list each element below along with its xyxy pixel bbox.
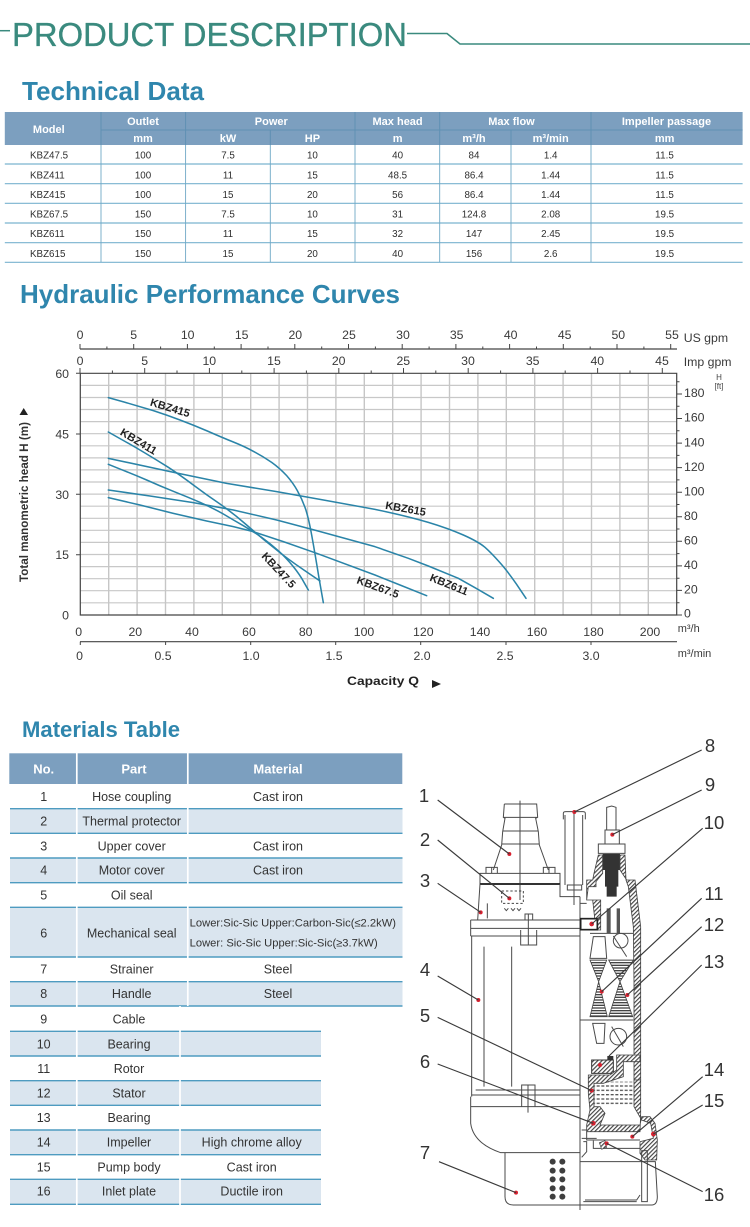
row 7: Strainer (110, 962, 154, 976)
row KBZ415: 1.44 (541, 190, 561, 201)
axis: Imp gpm: Imp gpm (684, 355, 732, 369)
row 5: 5 (40, 888, 47, 902)
part numbers: 3 (420, 870, 430, 891)
row KBZ411: 48.5 (388, 170, 408, 182)
axis: US gpm: 40 (504, 328, 518, 342)
table header: Power (255, 116, 289, 128)
strainer holes (550, 1159, 565, 1200)
axis: capacity m3/h: 160 (527, 625, 547, 639)
row 12: 12 (37, 1086, 51, 1100)
part numbers: 14 (704, 1059, 724, 1080)
row KBZ415: 86.4 (464, 190, 484, 201)
oil chamber (593, 1082, 633, 1107)
axis: capacity m3/h: 80 (299, 625, 313, 639)
row 16: 16 (37, 1184, 51, 1198)
leader lines (438, 750, 703, 1193)
table header: m³/min (533, 133, 569, 145)
row 4: Motor cover (99, 864, 165, 878)
row 7: 7 (40, 962, 47, 976)
table header (9, 753, 402, 784)
axis: capacity m3/h: 20 (128, 625, 142, 639)
row KBZ615: 15 (223, 249, 234, 260)
axis: capacity m3/h: 180 (583, 625, 604, 639)
part markers (476, 810, 656, 1195)
strainer (505, 1153, 657, 1205)
label KBZ47.5: KBZ47.5 (259, 550, 298, 591)
row 1 (40, 790, 303, 804)
row KBZ611 (30, 229, 675, 240)
axis: head in metres: 45 (55, 428, 69, 442)
row KBZ67.5: 31 (392, 210, 403, 220)
row 12 (37, 1086, 146, 1100)
part numbers: 2 (420, 829, 430, 850)
part numbers (419, 735, 724, 1205)
axis: capacity m3/h: 40 (185, 625, 199, 639)
table header: Outlet (127, 116, 159, 128)
table header: Max flow (488, 116, 535, 128)
table header: No. (33, 762, 54, 776)
curve KBZ47.5 (108, 464, 308, 590)
upper cover (478, 884, 580, 920)
row 4: 4 (40, 864, 47, 878)
motor interior (580, 903, 633, 1020)
axis: capacity m3/min: 2.0 (413, 649, 431, 663)
lower bearing (592, 1060, 613, 1073)
row borders (10, 809, 402, 1204)
row 3: Upper cover (98, 839, 166, 853)
part numbers: 9 (705, 774, 715, 795)
row 9: Cable (113, 1013, 145, 1027)
part numbers: 12 (704, 914, 724, 935)
row 12: Stator (112, 1086, 146, 1100)
axis: capacity m3/h: 200 (640, 625, 660, 639)
axis: head in feet: 120 (684, 460, 705, 474)
row KBZ615: 2.6 (544, 249, 558, 260)
row KBZ67.5: 19.5 (655, 210, 675, 220)
row KBZ47.5: 11.5 (655, 150, 674, 162)
axis: capacity m3/h: 100 (354, 625, 374, 639)
row KBZ415 (30, 190, 674, 201)
axis: Imp gpm: 5 (141, 354, 148, 368)
part numbers: 6 (420, 1051, 430, 1072)
row 13: 13 (37, 1111, 51, 1125)
axis: capacity m3/min: 3.0 (582, 649, 600, 663)
motor cover (472, 897, 580, 1210)
row 5 (40, 888, 153, 902)
row 8: 8 (40, 987, 47, 1001)
row KBZ67.5: 10 (307, 210, 318, 220)
row 3: Cast iron (253, 839, 303, 853)
table header: m³/h (462, 133, 486, 145)
label KBZ411: KBZ411 (118, 427, 159, 458)
heading: hydraulic performance curves: Hydraulic Performance Curves (20, 279, 400, 309)
row KBZ615: 156 (466, 249, 483, 260)
axis: capacity m3/h: 60 (242, 625, 256, 639)
row 6: Lower: Sic-Sic Upper:Sic-Sic(≥3.7kW) (190, 938, 378, 950)
row 15: Pump body (97, 1160, 161, 1174)
cable gland (603, 854, 620, 897)
row KBZ615: 19.5 (655, 249, 675, 260)
part numbers: 7 (420, 1142, 430, 1163)
row KBZ67.5: 2.08 (541, 210, 561, 220)
table header: Material (253, 762, 303, 776)
axis: Imp gpm: 15 (267, 354, 281, 368)
axis: US gpm: 15 (235, 328, 249, 342)
heading: technical data: Technical Data (22, 76, 205, 106)
axis title: capacity Q (347, 674, 441, 688)
axis: capacity m3/h: 140 (470, 625, 490, 639)
heading: materials table: Materials Table (22, 717, 180, 742)
table header: m (393, 133, 403, 145)
row KBZ411: 11 (223, 170, 233, 182)
row KBZ47.5: 100 (135, 150, 152, 162)
chart grid (80, 385, 677, 603)
axis: head in feet: 60 (684, 534, 698, 548)
axis: head in feet: 20 (684, 582, 698, 596)
page title: product description: PRODUCT DESCRIPTION (12, 16, 407, 53)
curve KBZ415 (108, 398, 323, 603)
column gaps (77, 753, 188, 1205)
axis: head in feet: 180 (684, 386, 705, 400)
table header: Model (33, 124, 65, 136)
row KBZ611: KBZ611 (30, 229, 65, 240)
row KBZ67.5 (30, 210, 675, 220)
row KBZ615 (30, 249, 675, 260)
axis: US gpm: 10 (181, 328, 195, 342)
rotor and stator (590, 960, 633, 1017)
axis: Imp gpm: 20 (332, 354, 346, 368)
row KBZ411 (30, 170, 674, 182)
lower collar (471, 1085, 580, 1113)
row 2: 2 (40, 814, 47, 828)
label KBZ67.5: KBZ67.5 (355, 575, 400, 601)
row KBZ615: 150 (135, 249, 152, 260)
row KBZ411: 100 (135, 170, 152, 182)
row KBZ415: 56 (392, 190, 404, 201)
axis: US gpm: 25 (342, 328, 356, 342)
label KBZ615: KBZ615 (384, 500, 427, 519)
axis: US gpm (77, 328, 728, 349)
row 15: 15 (37, 1160, 51, 1174)
row KBZ611: 147 (466, 229, 482, 240)
axis: head in metres: 0 (62, 608, 69, 622)
row KBZ611: 150 (135, 229, 152, 240)
axis: Imp gpm: 0 (77, 354, 84, 368)
panel: materials table (9, 753, 403, 1205)
part numbers: 15 (704, 1090, 724, 1111)
axis: Imp gpm: 10 (202, 354, 216, 368)
table grid (5, 164, 743, 262)
part numbers: 4 (420, 959, 430, 980)
axis: head in feet: [ft] (715, 382, 723, 391)
row 15: Cast iron (227, 1160, 277, 1174)
row 8: Handle (112, 987, 152, 1001)
hose coupling (493, 801, 548, 900)
axis: capacity m3/min: 1.5 (325, 649, 343, 663)
plot frame (80, 373, 677, 615)
row 11 (37, 1062, 144, 1076)
row 9: 9 (40, 1013, 47, 1027)
table header: HP (305, 133, 320, 145)
axis: US gpm: 55 (665, 328, 679, 342)
row KBZ411: KBZ411 (30, 170, 65, 182)
part numbers: 13 (704, 951, 724, 972)
row KBZ47.5: 1.4 (544, 150, 558, 162)
label KBZ611: KBZ611 (428, 572, 470, 598)
axis: Imp gpm: 35 (526, 354, 540, 368)
row KBZ611: 11 (223, 229, 233, 240)
curve KBZ615 (108, 458, 526, 598)
axis: capacity m3/h: 0 (75, 625, 82, 639)
table header: kW (220, 133, 237, 145)
row 1: 1 (40, 790, 47, 804)
axis: capacity m3/min: 0 (76, 649, 83, 663)
part numbers: 1 (419, 785, 429, 806)
axis: capacity m3/min: 1.0 (242, 649, 260, 663)
part numbers: 5 (420, 1005, 430, 1026)
curve KBZ411 (108, 432, 320, 581)
axis: head in metres: 60 (55, 367, 69, 381)
chart: hydraulic performance curves (17, 328, 732, 688)
axis: US gpm: 35 (450, 328, 464, 342)
row KBZ615: 20 (307, 249, 318, 260)
row 14: High chrome alloy (202, 1135, 302, 1149)
row 8: Steel (264, 987, 292, 1001)
hatched oil chamber wall (587, 1055, 657, 1160)
row KBZ411: 86.4 (464, 170, 484, 182)
row 6: 6 (40, 926, 47, 940)
row 11: Rotor (114, 1062, 144, 1076)
row KBZ47.5: KBZ47.5 (30, 150, 69, 162)
volute (471, 1097, 580, 1153)
axis: head in metres: 30 (55, 488, 69, 502)
thermal protector (502, 891, 523, 903)
row KBZ411: 1.44 (541, 170, 561, 182)
row 4 (40, 864, 303, 878)
panel: technical data table (5, 112, 743, 262)
axis: US gpm: 20 (288, 328, 302, 342)
axis: capacity m3/min: 2.5 (496, 649, 514, 663)
part numbers: 10 (704, 812, 724, 833)
row KBZ415: KBZ415 (30, 190, 66, 201)
impeller (582, 1130, 640, 1157)
curve KBZ67.5 (108, 498, 427, 596)
cable (598, 806, 625, 853)
row 14: 14 (37, 1135, 51, 1149)
row KBZ415: 100 (135, 190, 152, 201)
axis: head in feet: 0 (684, 606, 691, 620)
row 10 (37, 1037, 151, 1051)
hatched housing wall (587, 855, 641, 1080)
table header: Max head (373, 116, 423, 128)
part numbers: 8 (705, 735, 715, 756)
axis: head in feet: 140 (684, 435, 705, 449)
row KBZ67.5: 124.8 (462, 210, 487, 220)
upper bearing (581, 919, 597, 930)
axis: head in feet: 40 (684, 558, 698, 572)
row 16: Ductile iron (220, 1184, 283, 1198)
axis title: capacity Q: Capacity Q (347, 674, 419, 688)
row 14 (37, 1135, 302, 1149)
axis: US gpm: 5 (130, 328, 137, 342)
axis: Imp gpm: 40 (590, 354, 604, 368)
part numbers: 16 (704, 1184, 724, 1205)
table header: mm (655, 133, 675, 145)
page title: product description (0, 16, 750, 53)
axis title: head: Total manometric head H (m) (17, 422, 31, 582)
motor collar (471, 914, 580, 945)
axis: capacity m3/min: 0.5 (154, 649, 172, 663)
row KBZ415: 15 (223, 190, 234, 201)
row 3 (40, 839, 303, 853)
row 6: Lower:Sic-Sic Upper:Carbon-Sic(≤2.2kW) (190, 918, 396, 930)
motor fittings (590, 937, 607, 1043)
table header: mm (133, 133, 153, 145)
row KBZ611: 32 (392, 229, 403, 240)
row KBZ611: 15 (307, 229, 318, 240)
axis: US gpm: 50 (611, 328, 625, 342)
axis: capacity m3/h: m³/h (678, 623, 700, 635)
axis: US gpm: 0 (77, 328, 84, 342)
axis: capacity m3/h: 120 (413, 625, 434, 639)
axis: US gpm: US gpm (684, 331, 728, 345)
row 10: 10 (37, 1037, 51, 1051)
row 14: Impeller (107, 1135, 151, 1149)
row KBZ47.5: 10 (307, 150, 318, 162)
row 1: Cast iron (253, 790, 303, 804)
axis: head in metres: 15 (55, 548, 69, 562)
row 6 (40, 918, 396, 950)
row KBZ415: 20 (307, 190, 318, 201)
row 11: 11 (37, 1062, 50, 1076)
axis: head in metres (17, 367, 80, 622)
axis: head in feet (677, 373, 723, 620)
part numbers: 11 (704, 883, 724, 904)
axis: Imp gpm: 45 (655, 354, 669, 368)
table header (5, 112, 743, 145)
row 7 (40, 962, 292, 976)
row 13: Bearing (107, 1111, 151, 1125)
row KBZ615: KBZ615 (30, 249, 66, 260)
row 2: Thermal protector (82, 814, 181, 828)
row KBZ47.5: 7.5 (221, 150, 235, 162)
curve KBZ611 (108, 490, 493, 598)
row KBZ611: 19.5 (655, 229, 675, 240)
row KBZ67.5: 150 (135, 210, 152, 220)
row KBZ415: 11.5 (655, 190, 674, 201)
pump bolt (583, 1151, 647, 1202)
row 6: Mechanical seal (87, 926, 177, 940)
row 16 (37, 1184, 283, 1198)
axis: Imp gpm (77, 354, 732, 373)
row 16: Inlet plate (102, 1184, 156, 1198)
row 8 (40, 987, 292, 1001)
axis: head in feet: H (716, 373, 722, 382)
row 3: 3 (40, 839, 47, 853)
label KBZ415: KBZ415 (149, 397, 191, 420)
row 9 (40, 1013, 145, 1027)
axis: head in feet: 80 (684, 509, 698, 523)
row shading (10, 809, 402, 1204)
diagram: pump cross-section (419, 735, 724, 1210)
row 7: Steel (264, 962, 292, 976)
row 5: Oil seal (111, 888, 153, 902)
axis: capacity m3/h (75, 623, 700, 639)
row KBZ67.5: 7.5 (221, 210, 235, 220)
row KBZ47.5: 40 (392, 150, 404, 162)
row 1: Hose coupling (92, 790, 171, 804)
performance curves (108, 397, 526, 603)
handle (563, 812, 585, 905)
row KBZ47.5 (30, 150, 674, 162)
axis: Imp gpm: 25 (396, 354, 410, 368)
table header: Part (121, 762, 147, 776)
row KBZ67.5: KBZ67.5 (30, 210, 69, 220)
row KBZ615: 40 (392, 249, 404, 260)
row 4: Cast iron (253, 864, 303, 878)
axis: capacity m3/min: m³/min (678, 648, 711, 660)
axis: Imp gpm: 30 (461, 354, 475, 368)
row 15 (37, 1160, 277, 1174)
row KBZ411: 11.5 (655, 170, 674, 182)
flange and nuts (480, 867, 560, 884)
row 10: Bearing (107, 1037, 151, 1051)
row KBZ611: 2.45 (541, 229, 561, 240)
axis: US gpm: 30 (396, 328, 410, 342)
axis: US gpm: 45 (558, 328, 572, 342)
axis: capacity m3/min (76, 642, 711, 663)
row 13 (37, 1111, 151, 1125)
row KBZ411: 15 (307, 170, 318, 182)
axis: head in feet: 160 (684, 411, 705, 425)
axis: head in feet: 100 (684, 484, 705, 498)
row KBZ47.5: 84 (469, 150, 480, 162)
table header: Impeller passage (622, 116, 711, 128)
